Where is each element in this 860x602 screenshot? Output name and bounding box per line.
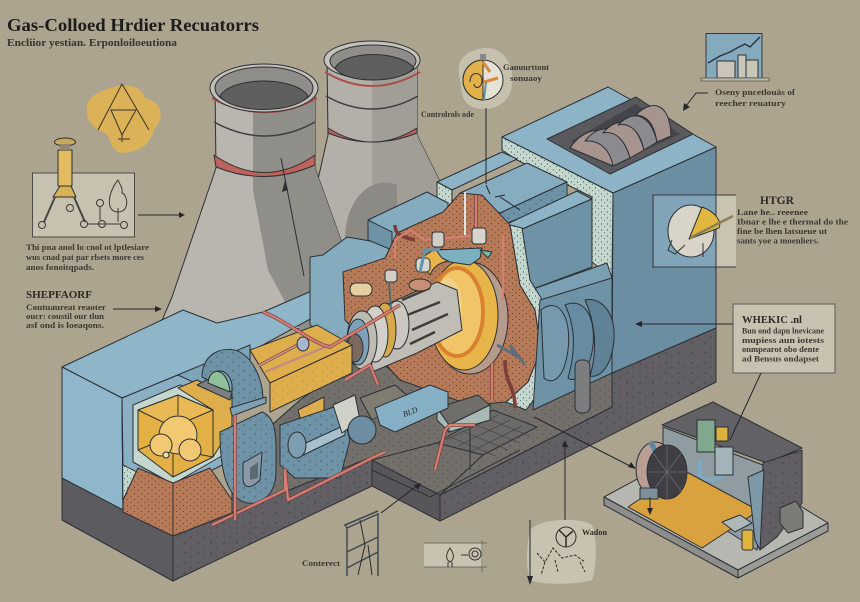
- panel: WHEKIC callout: mupiess aun iotests: [742, 335, 825, 345]
- panel: WHEKIC callout: [733, 304, 835, 373]
- icon: yellow schematic blob: [87, 84, 161, 153]
- text block: containment note: [26, 302, 106, 330]
- arch pipe housing: [197, 349, 266, 416]
- text block: containment note: asf ond is loeaqons.: [26, 320, 104, 330]
- panel: WHEKIC callout: Bun ond dapn lnevicane: [742, 326, 824, 336]
- foundation: right run: [440, 328, 716, 521]
- label: controls: Controlrols ode: [421, 109, 474, 119]
- panel: WHEKIC callout: onmpearot obo dente: [742, 344, 819, 354]
- text block: chart note: Oseny pncetlouäs of: [715, 87, 795, 97]
- foundation: left run: [62, 457, 372, 581]
- text block: flask note: Thi pna anol lo cnol ot lptlesiare: [26, 242, 149, 252]
- corner line: [172, 483, 174, 581]
- yellow duct: [250, 325, 352, 425]
- yellow heated disc: [420, 249, 508, 374]
- panel: WHEKIC callout: ad Bensus ondapset: [742, 354, 819, 364]
- callout: valve diagram: [459, 48, 512, 109]
- grid floor plate: [372, 410, 537, 497]
- hot gas pipes: [212, 195, 525, 525]
- arrow: molecule key to foundation: [562, 440, 568, 520]
- panel: WHEKIC callout: WHEKIC .nl: [742, 315, 802, 326]
- panel: HTGR inset: [653, 195, 736, 267]
- left reactor block: [62, 283, 345, 512]
- text block: HTGR note: Lane he.. reeenee: [737, 207, 808, 217]
- horizontal turbine cylinder: [347, 282, 462, 372]
- heading: SHEPFAORF: SHEPFAORF: [26, 290, 92, 301]
- circulator vessel: [220, 412, 276, 503]
- line: WHEKIC panel to module: [730, 373, 761, 440]
- cooling tower: front: [160, 64, 345, 330]
- text block: HTGR note: [737, 207, 848, 246]
- heading: HTGR: HTGR: [760, 195, 795, 207]
- compressor assembly: [280, 385, 448, 478]
- arrow: molecule key downward: [527, 520, 533, 585]
- leader: valve: [486, 108, 520, 210]
- text block: flask note: anos fonoitqpads.: [26, 262, 94, 272]
- text block: HTGR note: sants yoe a moenliers.: [737, 236, 819, 246]
- foundation step: [372, 457, 440, 521]
- panel: flame key: [424, 540, 487, 572]
- arrow: subsystem to fan: [534, 417, 636, 469]
- concrete pedestal: [437, 395, 490, 432]
- arrow: containment: [113, 306, 162, 312]
- panel: molecule key: Wadon: [582, 527, 607, 537]
- icon: chart card: [701, 34, 769, 81]
- callout text: valve: Ganuurttont: [503, 62, 549, 72]
- brown insulation base: [123, 468, 232, 536]
- upper blue blocks: [437, 152, 612, 320]
- control valves: [350, 192, 492, 310]
- arrow: WHEKIC to vessel: [635, 321, 733, 327]
- cooling tower: rear: [300, 41, 450, 260]
- text block: flask note: wus cnad pat par rlsets more ces: [26, 252, 145, 262]
- callout text: valve: sonuaoy: [510, 73, 543, 83]
- panel: flask diagram: [32, 138, 134, 237]
- text block: HTGR note: fine be lhen latsueue ut: [737, 226, 827, 236]
- blue ribbed vessel: [533, 278, 614, 413]
- text block: HTGR note: Ibnar e lhe e thermal do the: [737, 216, 848, 226]
- title: Gas-Colloed Hrdier Recuatorrs: [7, 15, 259, 35]
- text block: containment note: Contuaureat reaoter: [26, 302, 106, 312]
- arrow: chart to vents: [683, 93, 708, 111]
- containment wall: left shell: [310, 192, 448, 400]
- text block: chart note: reecher reuatury: [715, 98, 787, 108]
- foundation corner face: [62, 478, 173, 581]
- text block: chart note: [715, 87, 795, 108]
- cavity insulation lining: [506, 225, 553, 410]
- cavity interior: [343, 193, 541, 405]
- yellow fuel compartment: [122, 375, 232, 490]
- text block: flask note: [26, 242, 149, 272]
- panel: molecule key: [527, 520, 607, 584]
- compressor assembly: BLD: [402, 405, 419, 419]
- subtitle: Encliior yestian. Erponloiloeutiona: [7, 38, 178, 49]
- arrow: ladder to floor: [381, 483, 421, 513]
- icon: ladder frame: [345, 511, 378, 576]
- concrete floor behind machinery: [232, 350, 612, 513]
- callout text: valve: [503, 62, 549, 83]
- text block: containment note: oucr: coustil our tlun: [26, 311, 104, 321]
- arrow: flask to tower: [138, 212, 185, 218]
- large reactor block: [502, 87, 716, 373]
- label: contereact: Conterect: [302, 558, 340, 568]
- small power module: [604, 402, 828, 578]
